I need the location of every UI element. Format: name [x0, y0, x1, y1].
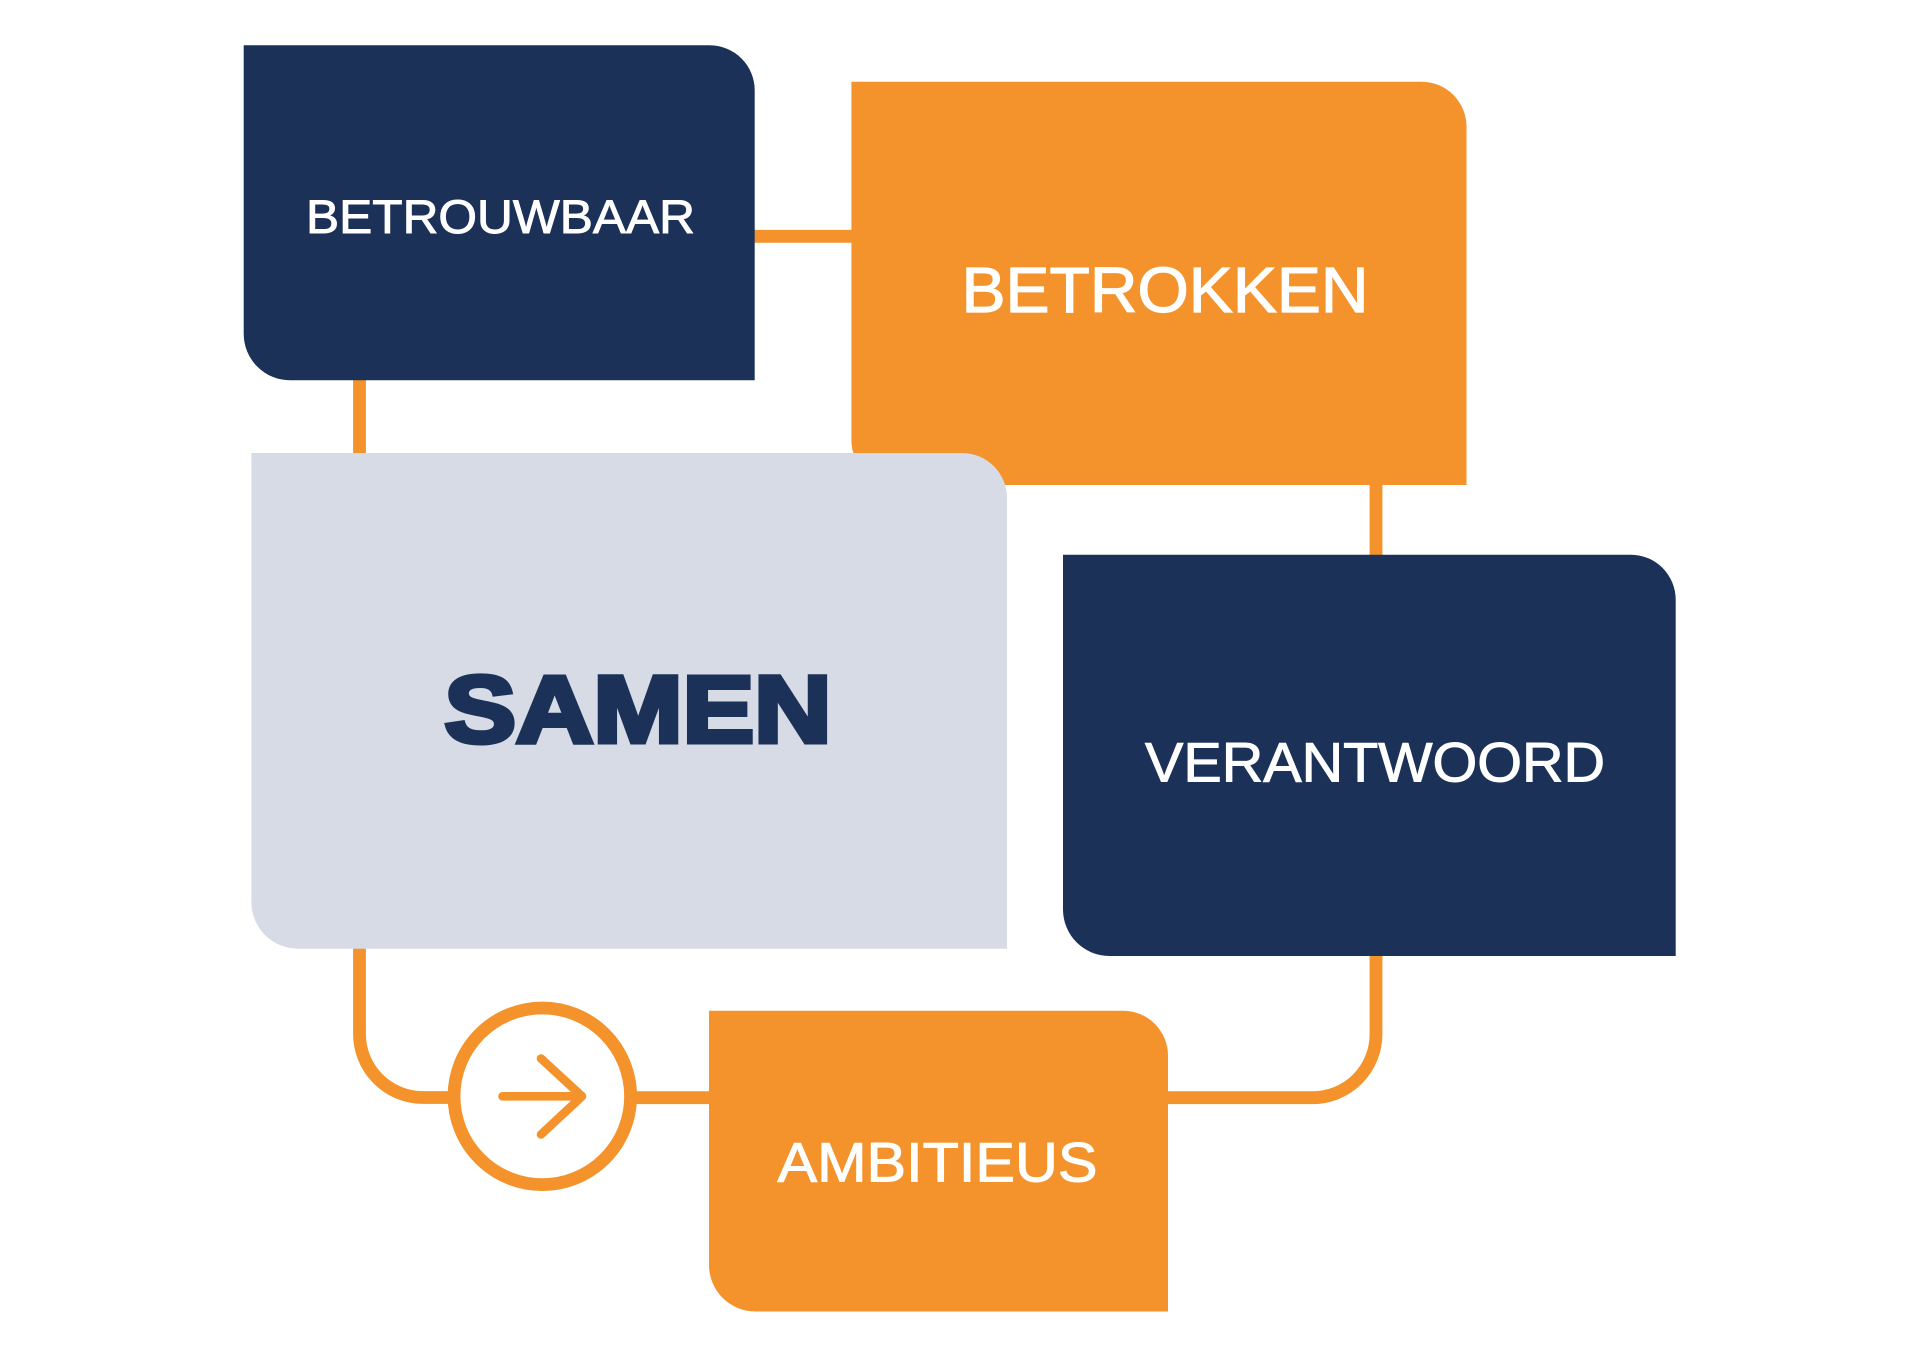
panel: betrouwbaar: [244, 45, 755, 380]
icon: arrow in circle: [454, 1008, 631, 1185]
label: samen: SAMEN: [444, 657, 832, 763]
panel: ambitieus: [709, 1011, 1168, 1312]
connector lines: [360, 236, 1376, 1098]
panel: betrokken: [851, 82, 1466, 485]
label: betrokken: BETROKKEN: [962, 254, 1368, 326]
label: ambitieus: AMBITIEUS: [778, 1130, 1098, 1194]
label: betrouwbaar: BETROUWBAAR: [306, 191, 695, 244]
panel: verantwoord: [1063, 555, 1676, 956]
label: verantwoord: VERANTWOORD: [1145, 730, 1605, 794]
panel: samen: [251, 453, 1007, 949]
